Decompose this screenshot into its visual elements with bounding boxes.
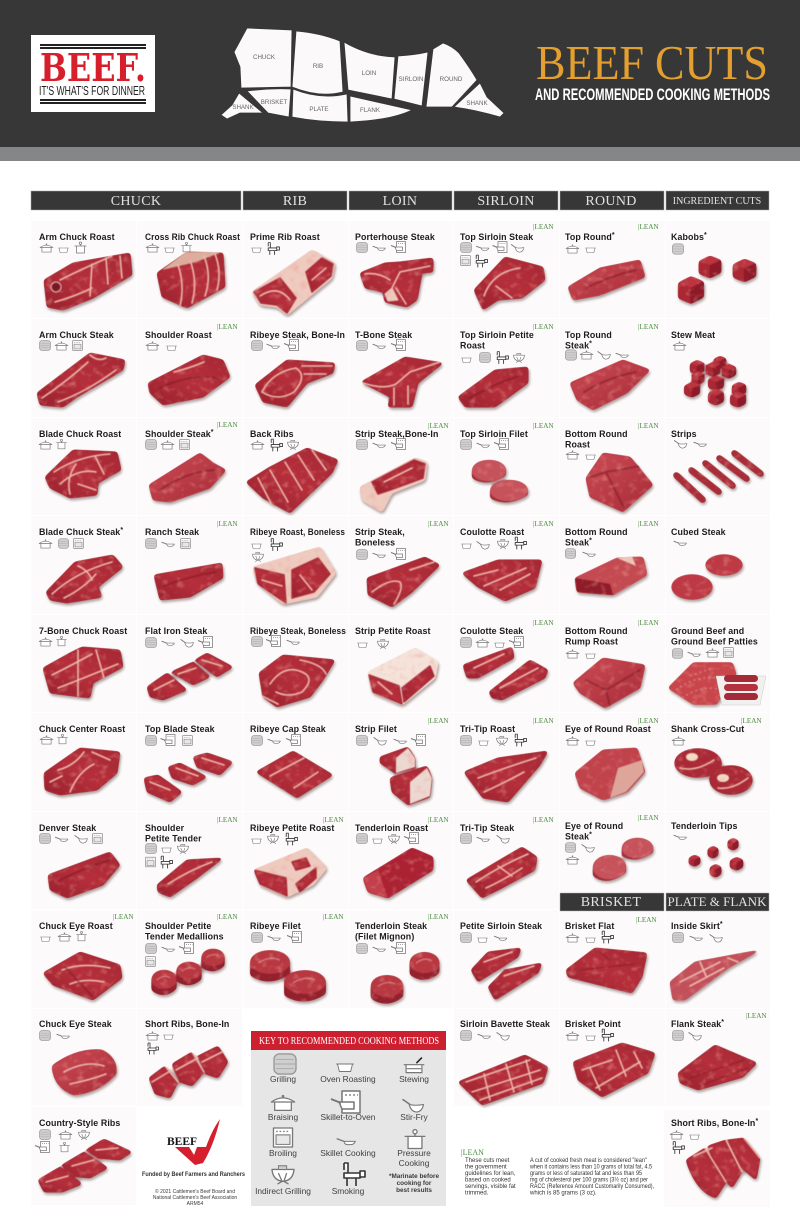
cut: Back Ribs [243,418,348,515]
funded by beef farmers logo [142,1119,245,1207]
cut: Strips: Strips [671,429,697,439]
plate and flank header: PLATE & FLANK [668,894,767,909]
lean definition note: based on cooked [465,1178,511,1184]
cut: Blade Chuck Steak [31,516,136,614]
cut: Tenderloin Steak (Filet Mignon): Tenderloin Steak [355,921,427,931]
cut: Coulotte Roast: Coulotte Roast [460,527,524,537]
lean definition note: the government [465,1164,507,1170]
cut: T-Bone Steak [349,319,453,417]
cut: Bottom Round Rump Roast: Bottom Round [565,626,628,636]
cut: Strip Filet [349,713,453,811]
cut: Ranch Steak: |LEAN [217,520,238,528]
cut: Bottom Round Steak: Steak [565,538,589,548]
cut: Arm Chuck Roast: Arm Chuck Roast [39,232,115,242]
cut: Strip Steak, Bone-In [349,418,453,515]
cut: Ground Beef and Ground Beef Patties: Ground Beef and [671,626,744,636]
cut: Top Sirloin Steak [454,221,559,318]
cut: Kabobs [666,221,770,318]
cut: Bottom Round Steak [560,516,665,614]
cut: Top Round: |LEAN [638,223,659,231]
cut: Top Round Steak: Top Round [565,330,612,340]
key labels: Oven Roasting [320,1074,376,1084]
cut: Top Sirloin Petite Roast: |LEAN [533,323,554,331]
cut: Kabobs: * [704,232,707,239]
section headers: SIRLOIN [477,194,535,209]
round column [560,221,665,1106]
section headers: RIB [283,194,307,209]
cut: Coulotte Roast [454,516,559,614]
cut: Ribeye Petite Roast [243,812,348,909]
cut: Cross Rib Chuck Roast [137,221,242,318]
cut: Porterhouse Steak [349,221,453,318]
cut: Top Sirloin Petite Roast: Top Sirloin Petite [460,330,534,340]
brisket header [560,893,664,911]
cut: Back Ribs: Back Ribs [250,429,294,439]
cut: Bottom Round Rump Roast: |LEAN [638,619,659,627]
cut: Denver Steak [31,812,136,909]
cut: Arm Chuck Steak: Arm Chuck Steak [39,330,114,340]
cut: Top Round: Top Round [565,232,612,242]
funded by beef farmers logo: Funded by Beef Farmers and Ranchers [142,1171,245,1178]
cut: Top Round: * [612,232,615,239]
cut: Blade Chuck Steak: * [120,527,123,534]
cut: Bottom Round Steak: Bottom Round [565,527,628,537]
cut: Cubed Steak [666,516,770,614]
funded by beef farmers logo: © 2021 Cattlemen's Beef Board and [155,1188,235,1195]
cut: Arm Chuck Roast [31,221,136,318]
key labels: Grilling [270,1074,296,1084]
beef cuts map: CHUCK [253,54,276,61]
cut: Short Ribs, Bone-In: * [755,1118,758,1125]
cut: Bottom Round Roast: Bottom Round [565,429,628,439]
beef cuts map: SIRLOIN [399,76,423,83]
cut: Short Ribs, Bone-In [137,1009,242,1106]
cut: Chuck Eye Roast [31,910,136,1008]
lean definition note: grams or less of saturated fat and less than 95 [530,1171,643,1177]
cut: Shoulder Steak: * [211,429,214,436]
lean definition note: RACC (Reference Amount Customarily Consumed), [530,1184,654,1190]
cut: Short Ribs, Bone-In: Short Ribs, Bone-In [671,1118,755,1128]
cut: Petite Sirloin Steak: Petite Sirloin Steak [460,921,542,931]
cut: Strip Steak, Boneless: Boneless [355,538,395,548]
cut: Shoulder Petite Tender: Shoulder [145,823,184,833]
key labels: *Marinate before [389,1173,439,1180]
funded by beef farmers logo: BEEF [167,1136,197,1148]
cut: Sirloin Bavette Steak: Sirloin Bavette Steak [460,1019,550,1029]
cut: Shank Cross-Cut: Shank Cross-Cut [671,724,744,734]
cut: Ribeye Roast, Boneless: Ribeye Roast, Boneless [250,527,345,537]
lean definition note: which is 85 grams (3 oz). [529,1190,597,1196]
cut: Ribeye Filet [243,910,348,1008]
cut: Chuck Eye Steak: Chuck Eye Steak [39,1019,112,1029]
cut: Tri-Tip Roast [454,713,559,811]
cut: Chuck Center Roast: Chuck Center Roast [39,724,125,734]
key header: KEY TO RECOMMENDED COOKING METHODS [259,1036,439,1047]
key labels: Cooking [399,1158,430,1168]
cut: Shoulder Steak [137,418,242,515]
section headers: CHUCK [111,194,161,209]
cut: Tenderloin Tips: Tenderloin Tips [671,821,738,831]
key labels: Pressure [397,1148,431,1158]
cut: Strip Petite Roast [349,615,453,712]
cut: Top Sirloin Steak: |LEAN [533,223,554,231]
key labels: Stir-Fry [400,1112,429,1122]
cut: Shoulder Roast: |LEAN [217,323,238,331]
key header [251,1031,446,1050]
section headers [31,191,769,210]
title: BEEF CUTS [536,35,768,90]
cut: Tenderloin Roast: |LEAN [428,816,449,824]
cut: Inside Skirt: Inside Skirt [671,921,720,931]
cut: Shoulder Petite Tender Medallions: Shoulder Petite [145,921,211,931]
logo: Beef It's What's For Dinner [31,35,155,112]
lean definition note: when it contains less than 10 grams of total fat, 4.5 [529,1164,653,1170]
cut: Ranch Steak: Ranch Steak [145,527,199,537]
key labels: Skillet-to-Oven [321,1112,376,1122]
cut: Blade Chuck Roast [31,418,136,515]
cut: Eye of Round Steak [560,812,665,892]
cut: Strip Steak, Bone-In: Strip Steak,Bone-In [355,429,438,439]
cut: Ribeye Steak, Bone-In: Ribeye Steak, Bone-In [250,330,345,340]
cut: Tri-Tip Steak: |LEAN [533,816,554,824]
cut: Ranch Steak [137,516,242,614]
cut: Shank Cross-Cut: |LEAN [741,717,762,725]
cut: Ribeye Petite Roast: Ribeye Petite Roast [250,823,334,833]
cut: Eye of Round Roast: |LEAN [638,717,659,725]
cut: Tenderloin Tips [666,812,770,892]
section headers: LOIN [383,194,417,209]
cut: Brisket Flat: |LEAN [636,916,657,924]
cut: Strip Filet: Strip Filet [355,724,397,734]
beef cuts map: PLATE [309,106,329,113]
cut: Ribeye Roast, Boneless [243,516,348,614]
cut: 7-Bone Chuck Roast: 7-Bone Chuck Roast [39,626,127,636]
cut: Top Round Steak: * [589,340,592,348]
key labels: Braising [268,1112,298,1122]
cut: Ribeye Cap Steak: Ribeye Cap Steak [250,724,326,734]
cut: Tenderloin Roast [349,812,453,909]
cut: Coulotte Roast: |LEAN [533,520,554,528]
sirloin column [454,221,559,1106]
cut: Strip Steak, Boneless: |LEAN [428,520,449,528]
cut: Ribeye Cap Steak [243,713,348,811]
loin column [349,221,453,1008]
cut: Flank Steak: * [721,1019,724,1026]
cut: Top Sirloin Petite Roast [454,319,559,417]
cut: Shoulder Roast [137,319,242,417]
cut: Top Round [560,221,665,318]
cut: Ribeye Filet: Ribeye Filet [250,921,301,931]
cut: Eye of Round Steak: Eye of Round [565,821,623,831]
cut: Brisket Point: Brisket Point [565,1019,621,1029]
cut: Country-Style Ribs: Country-Style Ribs [39,1118,120,1128]
cut: Shank Cross-Cut [666,713,770,811]
cut: Tenderloin Roast: Tenderloin Roast [355,823,428,833]
cut: Inside Skirt: * [720,921,723,928]
beef cuts map: SHANK [466,100,489,107]
lean definition note: These cuts meet [465,1158,510,1164]
cut: Eye of Round Steak: |LEAN [638,814,659,822]
cut: T-Bone Steak: T-Bone Steak [355,330,412,340]
cut: Shoulder Petite Tender Medallions: Tender Medallions [145,932,224,942]
cut: Short Ribs, Bone-In: Short Ribs, Bone-In [145,1019,229,1029]
beef cuts map: FLANK [360,107,381,114]
cut: Bottom Round Rump Roast [560,615,665,712]
funded by beef farmers logo: National Cattlemen's Beef Association [153,1195,237,1201]
cut: Shoulder Roast: Shoulder Roast [145,330,212,340]
cut: Flank Steak [666,1009,770,1106]
cut: Strip Steak, Bone-In: |LEAN [428,422,449,430]
lean definition note: guidelines for lean, [465,1171,516,1177]
header banner [0,0,800,161]
cut: Top Sirloin Filet [454,418,559,515]
beef cuts map: RIB [313,63,323,70]
section headers: ROUND [585,194,637,209]
cut: Top Sirloin Filet: Top Sirloin Filet [460,429,528,439]
cut: Coulotte Steak [454,615,559,712]
cut: Cubed Steak: Cubed Steak [671,527,726,537]
cut: Bottom Round Steak: * [589,538,592,544]
cut: Chuck Eye Roast: |LEAN [113,913,134,921]
cut: Petite Sirloin Steak [454,910,559,1008]
cut: Shoulder Petite Tender Medallions: |LEAN [217,913,238,921]
cut: Top Round Steak [560,319,665,417]
cut: Top Sirloin Petite Roast: Roast [460,340,485,350]
cut: Tri-Tip Roast: Tri-Tip Roast [460,724,515,734]
lean definition note: |LEAN [461,1148,484,1157]
key labels: Stewing [399,1074,429,1084]
cut: Kabobs: Kabobs [671,232,704,242]
cut: Flank Steak: Flank Steak [671,1019,721,1029]
lean definition note: servings, visible fat [465,1184,516,1190]
cut: Chuck Eye Roast: Chuck Eye Roast [39,921,113,931]
cut: Chuck Center Roast [31,713,136,811]
cut: Brisket Flat: Brisket Flat [565,921,614,931]
cut: Shoulder Petite Tender Medallions [137,910,242,1008]
cut: Tenderloin Steak (Filet Mignon): (Filet Mignon) [355,932,414,942]
cut: Prime Rib Roast [243,221,348,318]
cut: Stew Meat [666,319,770,417]
cut: Tri-Tip Roast: |LEAN [533,717,554,725]
cut: Brisket Flat [560,912,665,1008]
cut: Flat Iron Steak: Flat Iron Steak [145,626,207,636]
cut: Shoulder Petite Tender [137,812,242,909]
cut: Shoulder Petite Tender: Petite Tender [145,834,202,844]
cut: Cross Rib Chuck Roast: Cross Rib Chuck Roast [145,232,240,242]
cut: Ground Beef and Ground Beef Patties: Ground Beef Patties [671,636,758,646]
key icons [271,1054,425,1186]
cut: Blade Chuck Roast: Blade Chuck Roast [39,429,121,439]
cut: Shoulder Steak: Shoulder Steak [145,429,211,439]
cut: Ribeye Filet: |LEAN [323,913,344,921]
lean definition note [461,1148,654,1196]
cut: Shoulder Petite Tender: |LEAN [217,816,238,824]
cut: Top Sirloin Steak: Top Sirloin Steak [460,232,533,242]
cut: Eye of Round Steak: * [589,832,592,838]
cut: Denver Steak: Denver Steak [39,823,96,833]
cut: 7-Bone Chuck Roast [31,615,136,712]
cut: Ground Beef and Ground Beef Patties [666,615,770,712]
beef cuts map: LOIN [362,70,376,77]
beef cuts map: ROUND [440,76,463,83]
key labels [255,1074,439,1196]
cut: Ribeye Steak, Bone-In [243,319,348,417]
cut: Brisket Point [560,1009,665,1106]
cut: Tenderloin Steak (Filet Mignon): |LEAN [428,913,449,921]
ingredient cuts column [664,221,770,1207]
cut: Strip Petite Roast: Strip Petite Roast [355,626,431,636]
cut: Chuck Eye Steak [31,1009,136,1106]
chuck column [31,221,136,1205]
lean definition note: mg of cholesterol per 100 grams (3½ oz) and per [530,1176,648,1184]
cut: Ribeye Petite Roast: |LEAN [323,816,344,824]
cut: Coulotte Steak: Coulotte Steak [460,626,523,636]
lean definition note: A cut of cooked fresh meat is considered "lean" [530,1158,647,1164]
cut: Top Blade Steak [137,713,242,811]
cut: Top Blade Steak: Top Blade Steak [145,724,215,734]
cut: Strips [666,418,770,515]
brisket header: BRISKET [581,895,641,910]
cut: Strip Filet: |LEAN [428,717,449,725]
cut: Porterhouse Steak: Porterhouse Steak [355,232,435,242]
cut: Sirloin Bavette Steak [454,1009,559,1106]
lean definition note: trimmed. [465,1190,489,1196]
cut: Bottom Round Roast: Roast [565,440,590,450]
cut: Eye of Round Roast [560,713,665,811]
key labels: Smoking [332,1186,365,1196]
cut: Top Sirloin Filet: |LEAN [533,422,554,430]
logo: Beef It's What's For Dinner: BEEF. [40,45,146,90]
beef cuts map: SHANK [232,104,255,111]
cut: Tri-Tip Steak: Tri-Tip Steak [460,823,514,833]
cut: Eye of Round Roast: Eye of Round Roast [565,724,651,734]
key labels: cooking for [397,1180,432,1187]
key to recommended cooking methods [251,1031,446,1206]
cut: Bottom Round Roast: |LEAN [638,422,659,430]
cut: Blade Chuck Steak: Blade Chuck Steak [39,527,120,537]
cut: Strip Steak, Boneless [349,516,453,614]
key labels: best results [396,1187,432,1194]
key labels: Indirect Grilling [255,1186,311,1196]
cut: Prime Rib Roast: Prime Rib Roast [250,232,320,242]
cut: Coulotte Steak: |LEAN [533,619,554,627]
cut: Flank Steak: |LEAN [746,1012,767,1020]
cut: Tenderloin Steak (Filet Mignon) [349,910,453,1008]
cut: Eye of Round Steak: Steak [565,832,589,842]
cut: Arm Chuck Steak [31,319,136,417]
cut: Ribeye Steak, Boneless [243,615,348,712]
beef cuts map: BRISKET [261,99,287,106]
section headers: INGREDIENT CUTS [673,196,761,207]
key labels: Broiling [269,1148,297,1158]
cut: Bottom Round Rump Roast: Rump Roast [565,636,618,646]
cut: Tri-Tip Steak [454,812,559,909]
cut: Short Ribs, Bone-In [664,1110,770,1207]
rib column [243,221,348,1008]
cut: Ribeye Steak, Boneless: Ribeye Steak, Boneless [250,626,346,636]
cut: Bottom Round Steak: |LEAN [638,520,659,528]
funded by beef farmers logo: ARM54 [187,1201,204,1207]
chuck second column [137,221,245,1207]
cut: Inside Skirt [666,912,770,1008]
logo: Beef It's What's For Dinner: IT'S WHAT'S FOR DINNER [39,83,145,98]
cut: Top Round Steak: |LEAN [638,323,659,331]
cut: Strip Steak, Boneless: Strip Steak, [355,527,405,537]
key labels: Skillet Cooking [320,1148,376,1158]
cut: Flat Iron Steak [137,615,242,712]
cut: Bottom Round Roast [560,418,665,515]
cut: Top Round Steak: Steak [565,340,589,350]
cut: Country-Style Ribs [31,1107,136,1205]
beef cuts map [221,28,504,122]
cut: Stew Meat: Stew Meat [671,330,715,340]
cut: Shoulder Steak: |LEAN [217,421,238,429]
